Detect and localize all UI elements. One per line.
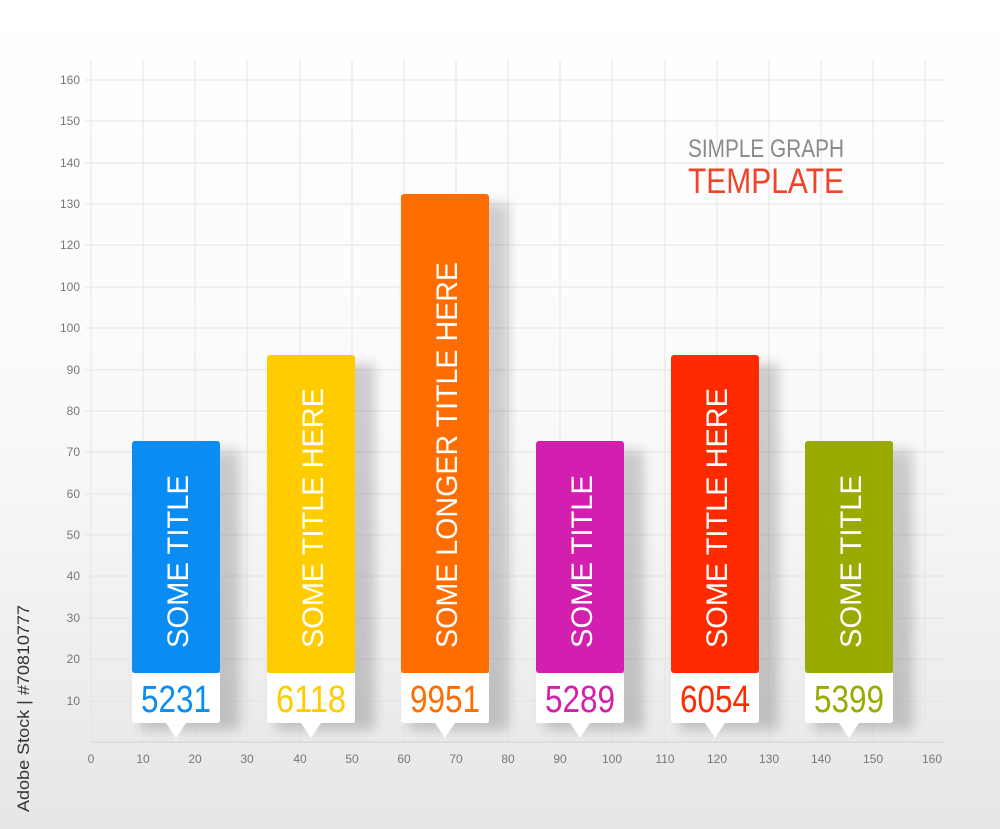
bar: yellow: 6118: [276, 679, 346, 721]
title: [688, 135, 844, 201]
y axis labels: [60, 73, 80, 708]
y axis labels: 100: [60, 321, 80, 335]
x axis labels: [88, 752, 942, 766]
x axis labels: 150: [863, 752, 883, 766]
y axis labels: 30: [67, 611, 80, 625]
y axis labels: 90: [67, 363, 80, 377]
x axis labels: 70: [449, 752, 463, 766]
bar: red: 6054: [680, 679, 750, 721]
y axis labels: 10: [67, 694, 80, 708]
y axis labels: 130: [60, 197, 80, 211]
bar: blue: 5231: [141, 679, 211, 721]
x axis labels: 120: [707, 752, 727, 766]
bar: red: SOME TITLE HERE: [701, 388, 734, 648]
bar: green: SOME TITLE: [835, 475, 868, 648]
bar: magenta: 5289: [545, 679, 615, 721]
bar: red: [671, 355, 779, 738]
x axis labels: 40: [293, 752, 307, 766]
title: SIMPLE GRAPH: [688, 135, 844, 163]
bar: yellow: SOME TITLE HERE: [297, 388, 330, 648]
y axis labels: 120: [60, 238, 80, 252]
x axis labels: 0: [88, 752, 95, 766]
x axis labels: 160: [922, 752, 942, 766]
bar: blue: SOME TITLE: [162, 475, 195, 648]
bar: orange: SOME LONGER TITLE HERE: [431, 262, 464, 648]
bar: magenta: [536, 441, 644, 738]
bar: yellow: [267, 355, 375, 738]
y axis labels: 70: [67, 445, 80, 459]
title: TEMPLATE: [688, 162, 844, 201]
bar: green: 5399: [814, 679, 884, 721]
y axis labels: 160: [60, 73, 80, 87]
x axis labels: 10: [136, 752, 150, 766]
x axis labels: 30: [240, 752, 254, 766]
x axis labels: 130: [759, 752, 779, 766]
x axis labels: 110: [655, 752, 675, 766]
bar: orange: [401, 194, 509, 738]
bar: green: [805, 441, 913, 738]
x axis labels: 140: [811, 752, 831, 766]
y axis labels: 20: [67, 652, 80, 666]
y axis labels: 150: [60, 114, 80, 128]
bar: blue: [132, 441, 240, 738]
bar: magenta: SOME TITLE: [566, 475, 599, 648]
x axis labels: 60: [397, 752, 411, 766]
y axis labels: 80: [67, 404, 80, 418]
x axis labels: 90: [553, 752, 567, 766]
y axis labels: 40: [67, 569, 80, 583]
x axis labels: 100: [602, 752, 622, 766]
y axis labels: 140: [60, 156, 80, 170]
x axis labels: 80: [501, 752, 515, 766]
watermark text: Adobe Stock | #70810777: [14, 605, 33, 812]
y axis labels: 100: [60, 280, 80, 294]
y axis labels: 50: [67, 528, 80, 542]
y axis labels: 60: [67, 487, 80, 501]
x axis labels: 50: [345, 752, 359, 766]
bar: orange: 9951: [410, 679, 480, 721]
x axis labels: 20: [188, 752, 202, 766]
